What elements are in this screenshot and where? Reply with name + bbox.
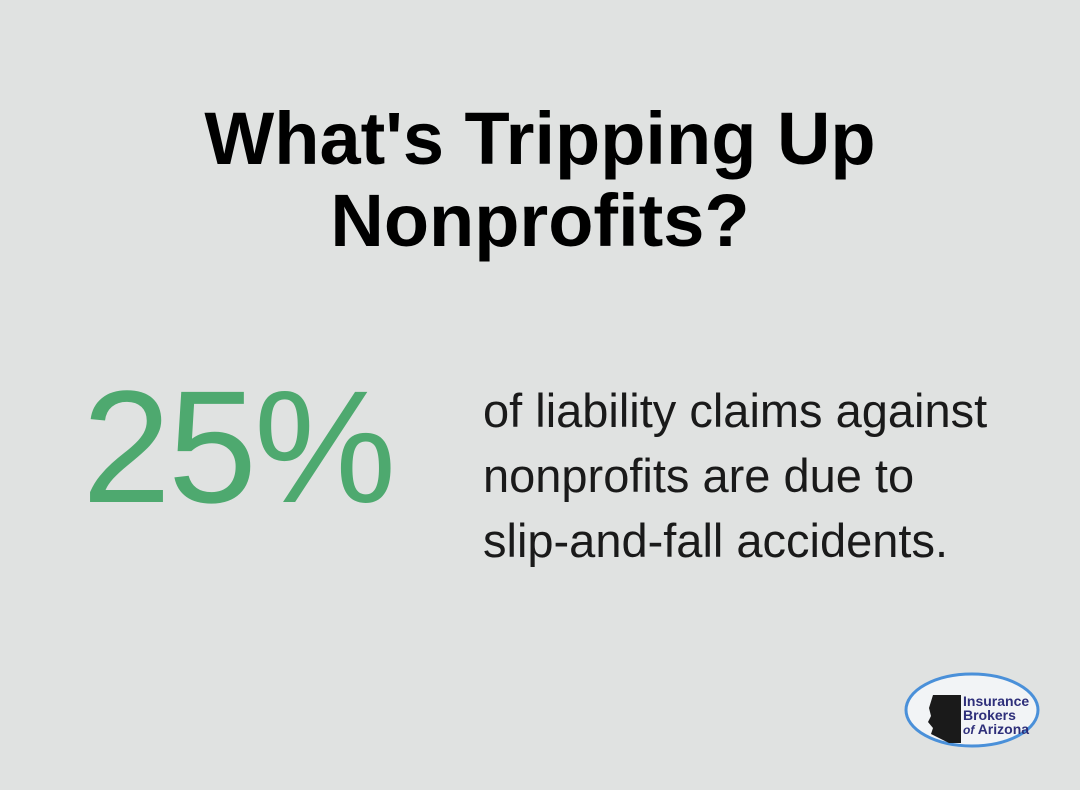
title <box>204 97 876 262</box>
stat number: 25% <box>82 357 393 536</box>
stat description: slip-and-fall accidents. <box>483 514 948 567</box>
logo: Insurance Brokers of Arizona: Insurance <box>963 693 1029 709</box>
stat description: of liability claims against <box>483 384 987 437</box>
title: What's Tripping Up <box>204 97 876 180</box>
logo: Insurance Brokers of Arizona <box>904 672 1040 748</box>
logo: Insurance Brokers of Arizona: Brokers <box>963 707 1016 723</box>
stat description <box>483 384 987 567</box>
stat description: nonprofits are due to <box>483 449 914 502</box>
title: Nonprofits? <box>330 179 750 262</box>
logo: Insurance Brokers of Arizona: of Arizona <box>963 721 1029 737</box>
